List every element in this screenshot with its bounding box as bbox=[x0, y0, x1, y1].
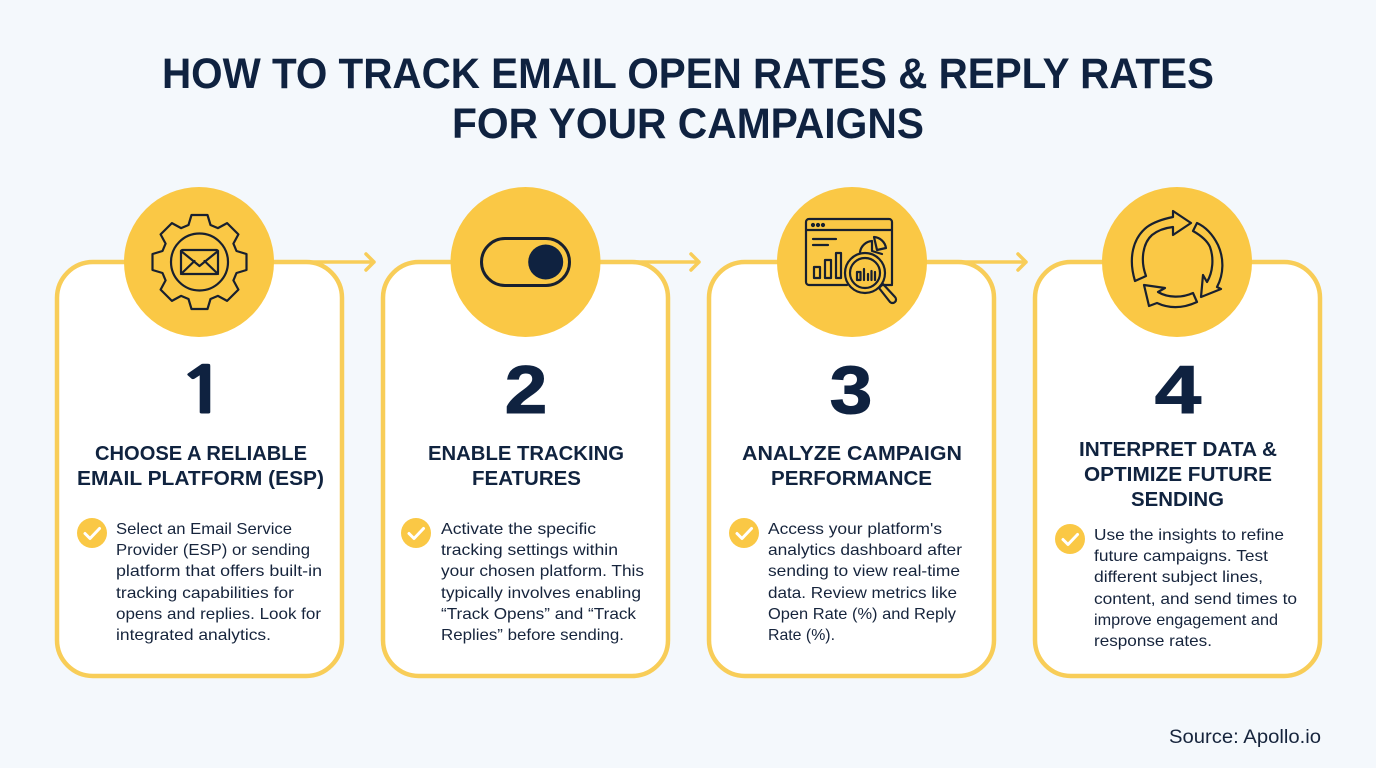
text: step 3 description bbox=[768, 521, 963, 644]
text: step 3 description: analytics dashboard after bbox=[768, 542, 963, 559]
card 3 outline bbox=[709, 262, 994, 676]
icon: check 2 bbox=[401, 518, 431, 548]
number 1: 1 bbox=[177, 360, 229, 423]
number 4: 4 bbox=[1155, 352, 1201, 428]
text: step 1 description: Provider (ESP) or sending bbox=[116, 542, 310, 559]
icon: check 1 bbox=[77, 518, 107, 548]
text: step 2 description: Activate the specific bbox=[441, 521, 596, 538]
text: step 1 description: platform that offers built-in bbox=[116, 563, 322, 580]
panel: step 3 bbox=[709, 187, 1026, 676]
text: step 3 description: Rate (%). bbox=[768, 627, 835, 644]
heading 3: PERFORMANCE bbox=[771, 467, 932, 490]
text: step 1 description bbox=[116, 521, 322, 644]
text: step 3 description: Open Rate (%) and Reply bbox=[768, 606, 956, 623]
text: step 2 description: “Track Opens” and “Track bbox=[441, 606, 637, 623]
text: step 2 description: Replies” before sending. bbox=[441, 627, 624, 644]
text: step 3 description: Access your platform's bbox=[768, 521, 942, 538]
text: step 3 description: data. Review metrics like bbox=[768, 585, 957, 602]
heading 3: ANALYZE CAMPAIGN bbox=[742, 442, 962, 465]
heading 2 bbox=[428, 442, 624, 490]
card 1 outline bbox=[57, 262, 342, 676]
panel: step 4 bbox=[1035, 187, 1320, 676]
arrow: step 1 to step 2 bbox=[270, 254, 374, 270]
text: step 2 description bbox=[441, 521, 644, 644]
heading 2: FEATURES bbox=[472, 467, 581, 490]
arrow: step 2 to step 3 bbox=[596, 254, 699, 270]
number 3: 3 bbox=[830, 352, 872, 428]
text: step 4 description bbox=[1094, 527, 1297, 650]
text: step 2 description: your chosen platform. This bbox=[441, 563, 644, 580]
text: step 1 description: opens and replies. Look for bbox=[116, 606, 322, 623]
icon: check 4 bbox=[1055, 524, 1085, 554]
heading 2: ENABLE TRACKING bbox=[428, 442, 624, 465]
text: step 3 description: sending to view real-time bbox=[768, 563, 960, 580]
icon: check 3 bbox=[729, 518, 759, 548]
icon: gear with envelope bbox=[124, 187, 274, 337]
icon: toggle switch bbox=[450, 187, 600, 337]
card 2 outline bbox=[383, 262, 668, 676]
heading 3 bbox=[742, 442, 962, 490]
heading 1 bbox=[77, 442, 324, 490]
panel: step 2 bbox=[383, 187, 699, 676]
icon: analytics dashboard with magnifier bbox=[777, 187, 927, 337]
card 4 outline bbox=[1035, 262, 1320, 676]
heading 1: CHOOSE A RELIABLE bbox=[95, 442, 307, 465]
heading 4: SENDING bbox=[1131, 488, 1224, 511]
arrow: step 3 to step 4 bbox=[922, 254, 1026, 270]
title: FOR YOUR CAMPAIGNS bbox=[452, 101, 924, 148]
icon: cycle arrows bbox=[1102, 187, 1252, 337]
text: step 4 description: different subject lines, bbox=[1094, 569, 1263, 586]
heading 1: EMAIL PLATFORM (ESP) bbox=[77, 467, 324, 490]
heading 4: INTERPRET DATA & bbox=[1079, 438, 1277, 461]
text: step 4 description: improve engagement and bbox=[1094, 612, 1278, 629]
title: HOW TO TRACK EMAIL OPEN RATES & REPLY RATES bbox=[162, 51, 1214, 98]
text: step 1 description: integrated analytics. bbox=[116, 627, 271, 644]
number 2: 2 bbox=[505, 352, 547, 428]
text: step 1 description: Select an Email Service bbox=[116, 521, 292, 538]
text: step 4 description: future campaigns. Test bbox=[1094, 548, 1269, 565]
text: step 4 description: response rates. bbox=[1094, 633, 1212, 650]
text: step 4 description: content, and send times to bbox=[1094, 591, 1297, 608]
heading 4: OPTIMIZE FUTURE bbox=[1084, 463, 1272, 486]
text: step 1 description: tracking capabilities for bbox=[116, 585, 295, 602]
source note: Source: Apollo.io bbox=[1169, 727, 1321, 748]
text: step 4 description: Use the insights to refine bbox=[1094, 527, 1284, 544]
text: step 2 description: typically involves enabling bbox=[441, 585, 641, 602]
panel: step 1 bbox=[57, 187, 374, 676]
heading 4 bbox=[1079, 438, 1277, 511]
text: step 2 description: tracking settings within bbox=[441, 542, 618, 559]
title bbox=[162, 51, 1214, 148]
